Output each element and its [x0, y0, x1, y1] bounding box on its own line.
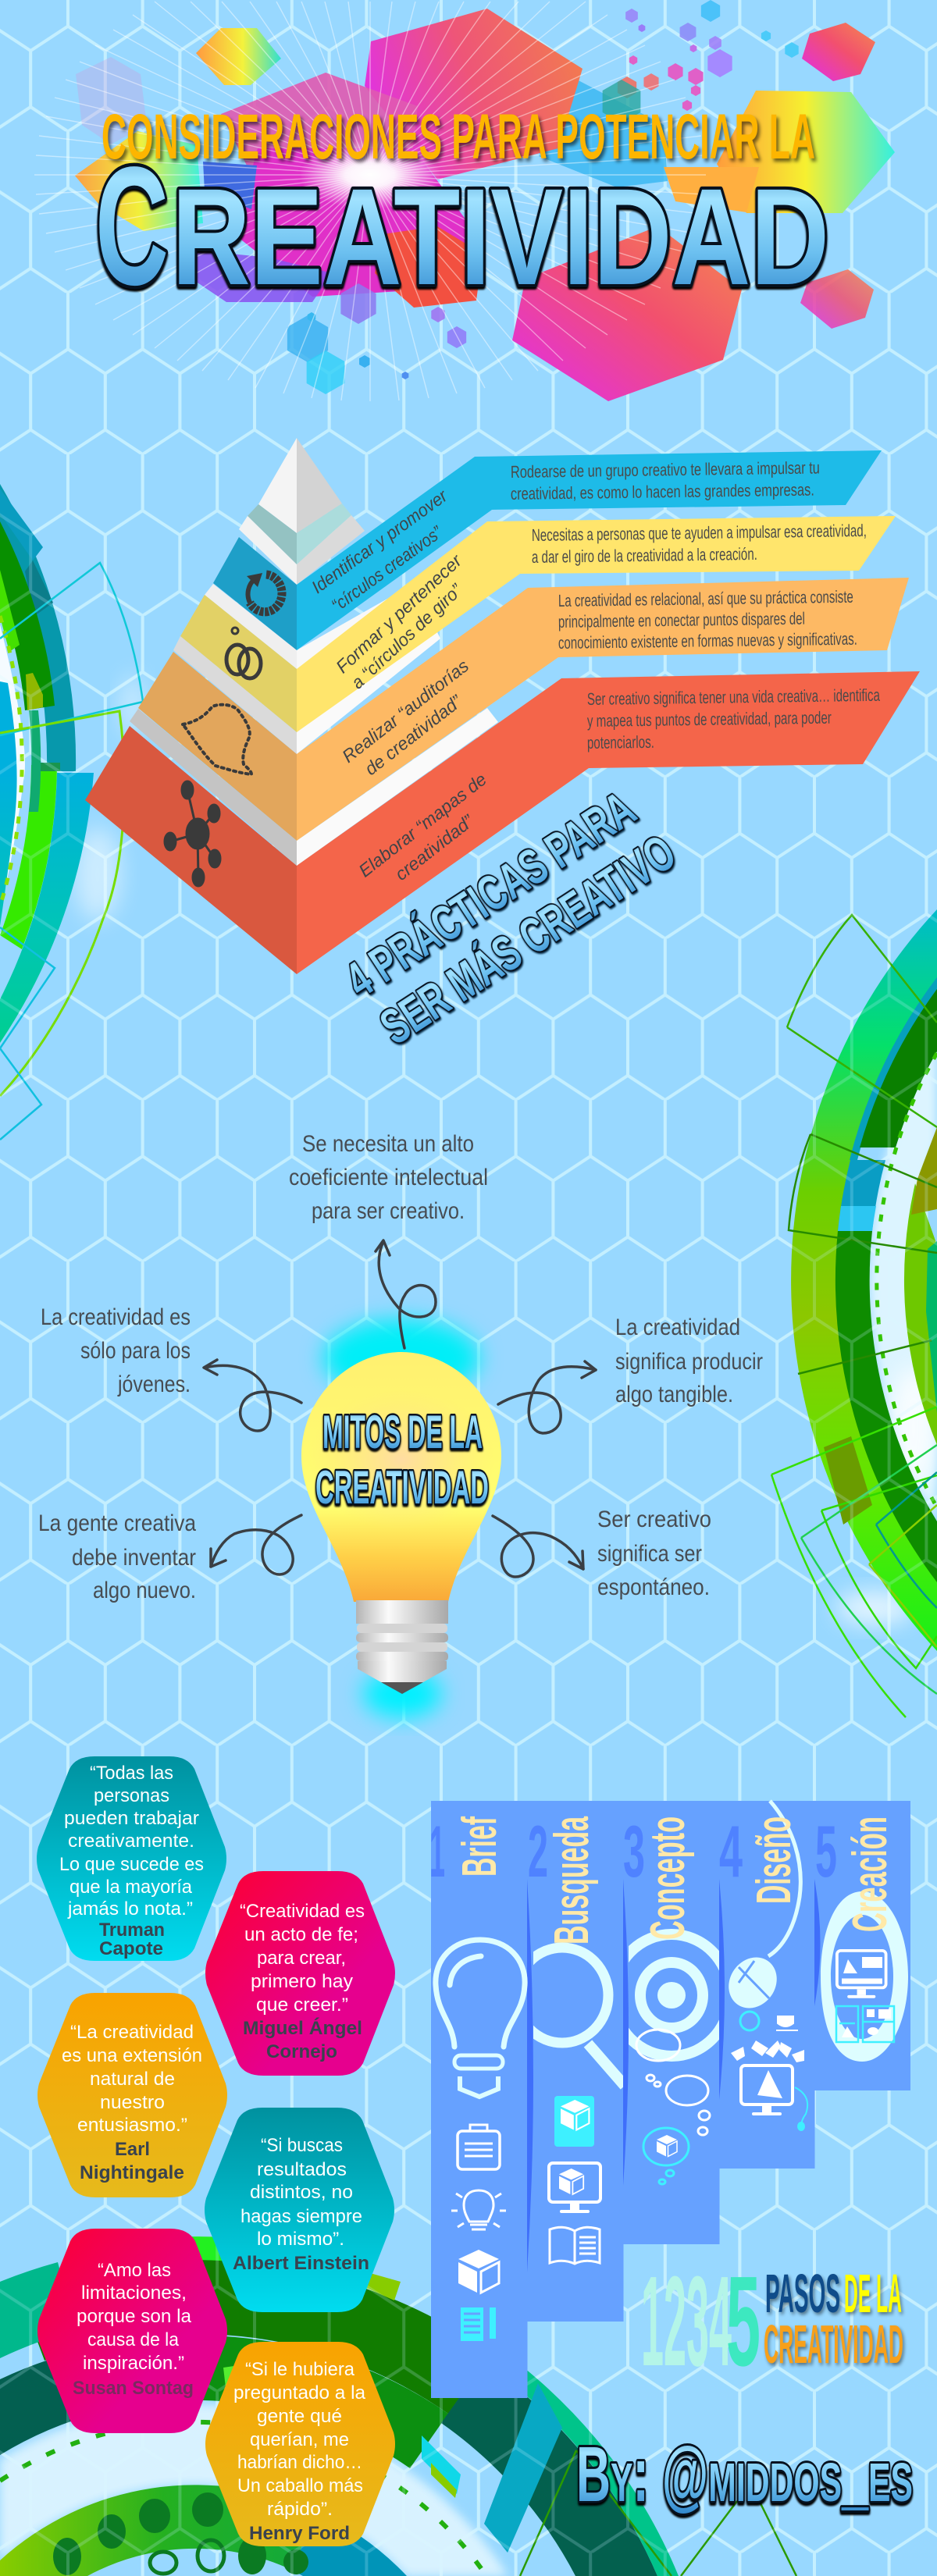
quote: Susan Sontag: “Amo las	[98, 2260, 171, 2281]
myth text: lower left: La gente creativa	[38, 1510, 196, 1536]
quote: Susan Sontag: causa de la	[87, 2329, 180, 2350]
quote: Miguel Ángel Cornejo: primero hay	[251, 1971, 353, 1992]
title	[95, 101, 829, 320]
quote: Henry Ford	[205, 2342, 395, 2546]
myth text: top	[289, 1131, 488, 1224]
ribbon: red	[297, 671, 920, 974]
ribbon labels: Realizar “auditorías	[338, 655, 472, 767]
quote: Henry Ford: Un caballo más	[237, 2475, 363, 2496]
decoration: left tech ring	[0, 484, 145, 1140]
quote: Henry Ford: gente qué	[257, 2406, 342, 2427]
quote: Miguel Ángel Cornejo: Cornejo	[266, 2041, 337, 2062]
ribbon paragraphs: potenciarlos.	[587, 732, 654, 753]
panel: myths of creativity	[38, 1131, 763, 1717]
quote: Susan Sontag	[37, 2229, 227, 2433]
step 4: diseño: 4	[719, 1810, 743, 1892]
quote: Albert Einstein: lo mismo”.	[257, 2229, 344, 2250]
myth text: upper left: La creatividad es	[41, 1304, 191, 1330]
heading: mitos	[315, 1406, 489, 1514]
quote: Albert Einstein	[205, 2108, 394, 2312]
step 3: concepto: 3	[623, 1810, 645, 1892]
myth text: upper left	[41, 1304, 191, 1397]
icon: network	[165, 781, 220, 886]
header: colourful hexagon burst	[34, 0, 895, 401]
step 3: concepto	[624, 1817, 719, 2186]
step 3: concepto: Concepto	[641, 1816, 695, 1940]
quote: Albert Einstein: hagas siempre	[240, 2206, 362, 2227]
ribbon paragraphs: a dar el giro de la creatividad a la creación.	[532, 544, 757, 567]
step 1: brief	[429, 1810, 525, 2341]
quote: Albert Einstein: distintos, no	[250, 2182, 353, 2203]
ribbon labels: “círculos creativos”	[328, 521, 447, 615]
step columns	[431, 1801, 910, 2398]
icon: rings	[226, 628, 261, 678]
ribbon paragraphs	[511, 457, 881, 753]
quote: Henry Ford: querían, me	[250, 2429, 349, 2450]
quote: Susan Sontag: inspiración.”	[83, 2353, 184, 2374]
quote: Albert Einstein: Albert Einstein	[233, 2253, 369, 2274]
quote: Earl Nightingale: “La creatividad	[70, 2022, 194, 2043]
quote: Henry Ford: preguntado a la	[233, 2382, 366, 2403]
ribbon paragraphs: Rodearse de un grupo creativo te llevara a impulsar tu	[511, 457, 820, 482]
heading: mitos: MITOS DE LA	[322, 1406, 483, 1458]
ribbon: blue	[297, 450, 882, 650]
quote: Truman Capote: personas	[94, 1785, 169, 1806]
panel: five creativity steps	[429, 1801, 910, 2398]
ribbon: yellow	[297, 516, 896, 732]
ribbon labels	[308, 485, 490, 884]
quote: Truman Capote: Capote	[99, 1938, 163, 1959]
quote: Earl Nightingale	[37, 1993, 227, 2197]
step 4: diseño	[719, 1801, 807, 2131]
myth text: lower left: algo nuevo.	[93, 1578, 196, 1603]
myth text: upper right: algo tangible.	[615, 1382, 733, 1407]
heading: pasos de la creatividad: 1234	[641, 2250, 732, 2393]
step 2: búsqueda	[529, 1816, 623, 2265]
step 2: búsqueda: 2	[528, 1810, 548, 1892]
myth text: lower right	[597, 1507, 711, 1600]
step 1: brief: Brief	[453, 1816, 507, 1877]
heading: pasos de la creatividad: 5	[726, 2250, 761, 2393]
step 1: brief: 1	[429, 1810, 445, 1892]
heading: 4 prácticas	[336, 780, 686, 1055]
quote: Truman Capote: Truman	[99, 1920, 165, 1941]
quote: Miguel Ángel Cornejo: un acto de fe;	[244, 1924, 358, 1945]
step 5: creación: 5	[815, 1810, 837, 1892]
myth text: upper right: significa producir	[615, 1349, 763, 1375]
ribbon labels: Elaborar “mapas de	[354, 769, 490, 881]
ribbon paragraphs: creatividad, es como lo hacen las grandes empresas.	[511, 480, 814, 503]
decoration: bottom tech ring	[0, 2236, 796, 2576]
quote: Albert Einstein: “Si buscas	[261, 2135, 343, 2156]
quote: Truman Capote	[37, 1756, 226, 1961]
quote: Miguel Ángel Cornejo: “Creatividad es	[240, 1901, 365, 1922]
quote: Albert Einstein: resultados	[257, 2159, 347, 2180]
heading: mitos: CREATIVIDAD	[315, 1461, 489, 1514]
myth text: top: Se necesita un alto	[302, 1131, 474, 1157]
step 5: creación	[815, 1810, 908, 2062]
quote: Earl Nightingale: entusiasmo.”	[77, 2115, 187, 2136]
quote: Miguel Ángel Cornejo: para crear,	[257, 1948, 346, 1969]
myth text: lower left	[38, 1510, 196, 1603]
quote: Miguel Ángel Cornejo: que creer.”	[256, 1994, 348, 2016]
myth text: lower left: debe inventar	[72, 1545, 196, 1571]
quote: Truman Capote: que la mayoría	[69, 1877, 193, 1898]
panel: pyramid of 4 practices	[85, 438, 920, 974]
icon: dotted bell	[183, 705, 251, 774]
myth text: upper left: sólo para los	[80, 1338, 191, 1364]
icon: light bulb	[301, 1319, 501, 1717]
quote: Earl Nightingale: Nightingale	[80, 2162, 184, 2183]
icon: cycle arrow	[247, 573, 282, 612]
quote: Truman Capote: jamás lo nota.”	[67, 1898, 193, 1920]
myth text: upper left: jóvenes.	[117, 1372, 191, 1397]
ribbon paragraphs: y mapea tus puntos de creatividad, para poder	[587, 708, 832, 731]
ribbon labels: Identificar y promover	[308, 485, 452, 597]
quote: Truman Capote: Lo que sucede es	[59, 1854, 204, 1875]
step 2: búsqueda: Busqueda	[545, 1816, 599, 1944]
heading: 4 prácticas: SER MÁS CREATIVO	[370, 824, 686, 1055]
myth text: lower right: espontáneo.	[597, 1574, 710, 1600]
quote: Henry Ford: Henry Ford	[249, 2523, 350, 2544]
myth text: top: coeficiente intelectual	[289, 1165, 488, 1190]
quote: Susan Sontag: Susan Sontag	[73, 2378, 194, 2399]
myth text: upper right: La creatividad	[615, 1315, 740, 1340]
arrows	[204, 1240, 596, 1577]
quote: Truman Capote: creativamente.	[68, 1831, 194, 1852]
ribbon labels: creatividad”	[391, 810, 478, 884]
quote: Miguel Ángel Cornejo	[205, 1871, 395, 2076]
panel: quotes	[37, 1756, 395, 2546]
title: C	[95, 131, 169, 320]
quote: Miguel Ángel Cornejo: Miguel Ángel	[243, 2017, 362, 2039]
step 4: diseño: Diseño	[747, 1816, 801, 1904]
quote: Earl Nightingale: Earl	[115, 2139, 150, 2160]
quote: Earl Nightingale: nuestro	[100, 2092, 165, 2113]
myth text: lower right: Ser creativo	[597, 1507, 711, 1532]
heading: 4 prácticas: 4 PRÁCTICAS PARA	[336, 780, 645, 1009]
myth text: upper right	[615, 1315, 763, 1407]
ribbon paragraphs: principalmente en conectar puntos dispares del	[558, 609, 805, 632]
column dividers	[527, 1879, 820, 2272]
quote: Susan Sontag: porque son la	[77, 2306, 192, 2327]
myth text: top: para ser creativo.	[312, 1198, 465, 1224]
quote: Henry Ford: rápido”.	[267, 2499, 333, 2520]
quote: Henry Ford: habrían dicho…	[237, 2452, 362, 2473]
step 5: creación: Creación	[843, 1816, 897, 1932]
myth text: lower right: significa ser	[597, 1541, 702, 1567]
quote: Truman Capote: pueden trabajar	[64, 1808, 199, 1829]
ribbon labels: de creatividad”	[361, 690, 466, 779]
ribbon labels: a “círculos de giro”	[347, 579, 467, 692]
quote: Susan Sontag: limitaciones,	[81, 2282, 187, 2304]
quote: Truman Capote: “Todas las	[90, 1763, 173, 1784]
ribbon labels: Formar y pertenecer	[332, 550, 466, 677]
quote: Earl Nightingale: natural de	[90, 2069, 175, 2090]
ribbon: orange	[297, 578, 909, 841]
quote: Henry Ford: “Si le hubiera	[245, 2359, 355, 2380]
quote: Earl Nightingale: es una extensión	[62, 2045, 202, 2066]
decoration: right tech ring	[771, 909, 937, 1717]
